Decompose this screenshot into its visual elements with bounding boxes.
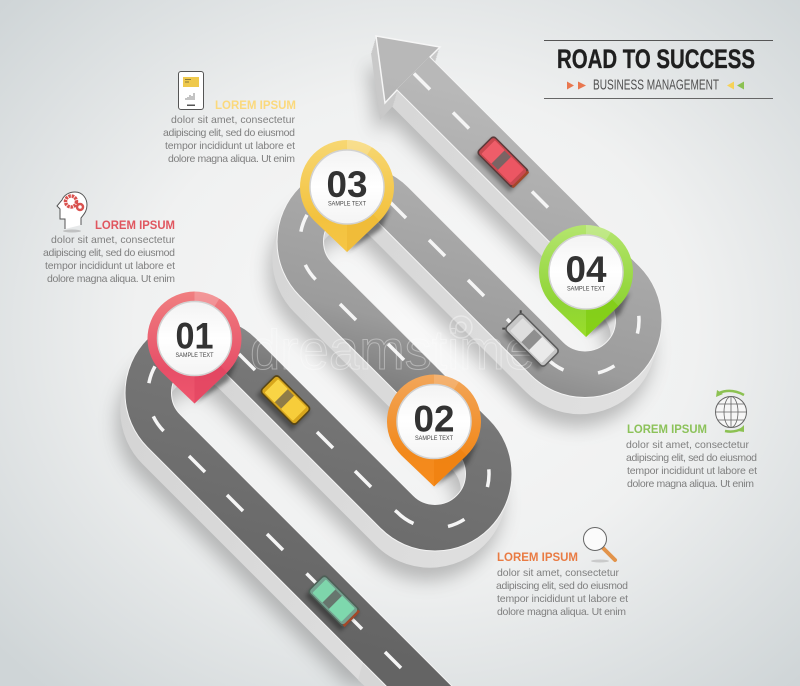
icon: globe with arrows xyxy=(716,390,746,432)
panel: top yellow text xyxy=(163,72,296,165)
pin shadow xyxy=(194,358,238,404)
body text: dolore magna aliqua. Ut enim xyxy=(497,606,626,618)
icon: magnifier xyxy=(584,528,615,562)
icon: head with gears xyxy=(57,192,87,232)
pin shadow xyxy=(586,292,630,337)
pin 04: 04 xyxy=(566,249,607,290)
body text: dolore magna aliqua. Ut enim xyxy=(47,273,175,285)
body text: dolore magna aliqua. Ut enim xyxy=(627,478,754,490)
road shadow xyxy=(139,66,630,686)
body text: tempor incididunt ut labore et xyxy=(45,260,175,272)
body text: dolore magna aliqua. Ut enim xyxy=(168,153,295,165)
pin 01: SAMPLE TEXT xyxy=(176,353,214,359)
car: white xyxy=(499,310,561,372)
pin 04 xyxy=(539,225,633,337)
pin 01: 01 xyxy=(176,316,214,356)
body text xyxy=(163,114,296,165)
body text: adipiscing elit, sed do eiusmod xyxy=(43,247,175,259)
body text xyxy=(496,567,628,618)
pin shadow xyxy=(347,207,391,252)
body text: tempor incididunt ut labore et xyxy=(497,593,628,605)
pin 01 xyxy=(148,291,242,404)
body text: dolor sit amet, consectetur xyxy=(497,567,620,579)
body text: tempor incididunt ut labore et xyxy=(627,465,757,477)
body text: dolor sit amet, consectetur xyxy=(626,439,750,451)
body text xyxy=(43,234,176,285)
car: green xyxy=(304,574,361,631)
body text: adipiscing elit, sed do eiusmod xyxy=(163,127,295,139)
pin 02: SAMPLE TEXT xyxy=(415,436,453,442)
subheading: BUSINESS MANAGEMENT xyxy=(593,76,719,94)
pin body xyxy=(387,375,481,486)
road surface xyxy=(148,36,639,686)
heading: LOREM IPSUM xyxy=(497,550,578,564)
car: red xyxy=(473,135,530,192)
pin 03: SAMPLE TEXT xyxy=(328,202,366,208)
pin body xyxy=(148,292,242,404)
heading: LOREM IPSUM xyxy=(627,422,707,436)
pin 02 xyxy=(387,374,481,486)
road side wall xyxy=(143,38,638,686)
arrows right xyxy=(727,82,744,90)
body text: tempor incididunt ut labore et xyxy=(165,140,295,152)
pin body xyxy=(539,225,633,337)
arrows left xyxy=(567,82,586,90)
road xyxy=(139,36,639,686)
watermark: dreamstime xyxy=(250,318,535,381)
pin shadow xyxy=(434,442,478,486)
heading: LOREM IPSUM xyxy=(95,218,175,232)
car: yellow xyxy=(256,373,313,430)
body text: adipiscing elit, sed do eiusmod xyxy=(496,580,628,592)
body text xyxy=(626,439,757,490)
heading: LOREM IPSUM xyxy=(215,98,296,112)
panel: right green text xyxy=(626,390,757,490)
panel: bottom orange text xyxy=(496,528,628,618)
pin 03: 03 xyxy=(326,164,368,205)
pin 04: SAMPLE TEXT xyxy=(567,286,605,292)
title block xyxy=(544,40,773,98)
panel: left red text xyxy=(43,192,176,285)
body text: dolor sit amet, consectetur xyxy=(171,114,296,126)
icon: tablet xyxy=(178,72,204,110)
pin 03 xyxy=(300,140,394,252)
body text: dolor sit amet, consectetur xyxy=(51,234,176,246)
lane dashes xyxy=(149,74,639,668)
pin 02: 02 xyxy=(414,398,454,440)
body text: adipiscing elit, sed do eiusmod xyxy=(626,452,757,464)
pin body xyxy=(300,140,394,252)
